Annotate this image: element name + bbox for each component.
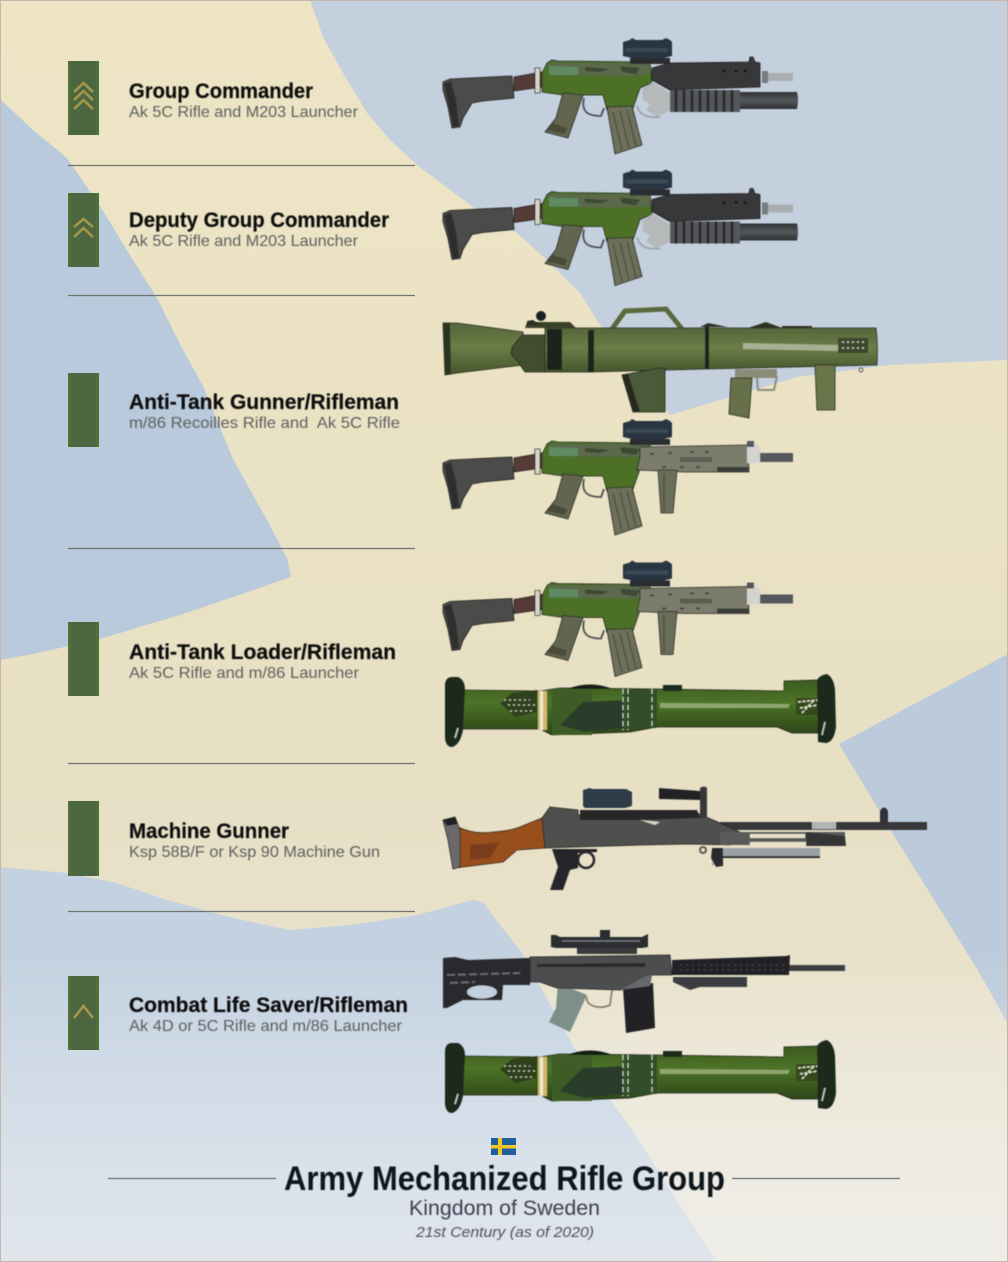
weapon: m/86 launcher (life saver) — [445, 1040, 836, 1113]
weapon: Ak 5C with M203 (deputy) — [443, 170, 798, 286]
weapon: Ksp 58 machine gun — [443, 786, 927, 890]
subtitle: Kingdom of Sweden — [409, 1197, 600, 1220]
row: Anti-Tank Gunner — [68, 373, 400, 447]
role title: Anti-Tank Gunner/Rifleman — [129, 391, 399, 414]
weapons text: Ak 4D or 5C Rifle and m/86 Launcher — [129, 1018, 403, 1035]
row: Deputy Group Commander — [68, 193, 389, 267]
title rule right — [732, 1178, 900, 1180]
title rule left — [108, 1178, 276, 1180]
role title: Deputy Group Commander — [129, 209, 389, 232]
row: Machine Gunner — [68, 801, 380, 876]
rank insignia: three chevrons — [68, 61, 99, 135]
rank insignia: plain — [68, 373, 99, 447]
date note: 21st Century (as of 2020) — [415, 1224, 594, 1241]
weapon: m/86 launcher (loader) — [445, 674, 836, 747]
row: Group Commander — [68, 61, 359, 135]
rank insignia: plain — [68, 801, 99, 876]
icon: Swedish flag — [491, 1138, 516, 1155]
rank insignia: one chevron — [68, 976, 99, 1050]
weapon: Ak 4D rifle with scope — [443, 930, 845, 1033]
row: Combat Life Saver — [68, 976, 408, 1050]
weapons text: Ksp 58B/F or Ksp 90 Machine Gun — [129, 844, 380, 861]
weapons text: Ak 5C Rifle and M203 Launcher — [129, 233, 359, 250]
rank insignia: two chevrons — [68, 193, 99, 267]
role title: Anti-Tank Loader/Rifleman — [129, 641, 396, 664]
weapon: Ak 5C rifle (gunner) — [443, 419, 793, 535]
weapon: Ak 5C rifle (loader) — [443, 560, 793, 676]
role title: Combat Life Saver/Rifleman — [129, 994, 408, 1017]
row: Anti-Tank Loader — [68, 622, 396, 696]
weapon: m/86 recoilless rifle — [443, 309, 877, 418]
weapons text: m/86 Recoilles Rifle and Ak 5C Rifle — [129, 415, 400, 432]
rank insignia: plain — [68, 622, 99, 696]
role title: Machine Gunner — [129, 820, 289, 843]
role title: Group Commander — [129, 80, 313, 103]
weapons text: Ak 5C Rifle and m/86 Launcher — [129, 665, 360, 682]
main title: Army Mechanized Rifle Group — [284, 1160, 725, 1198]
row dividers — [68, 166, 415, 912]
footer: title block — [108, 1138, 900, 1241]
weapons text: Ak 5C Rifle and M203 Launcher — [129, 104, 359, 121]
weapon: Ak 5C with M203 — [443, 38, 798, 154]
